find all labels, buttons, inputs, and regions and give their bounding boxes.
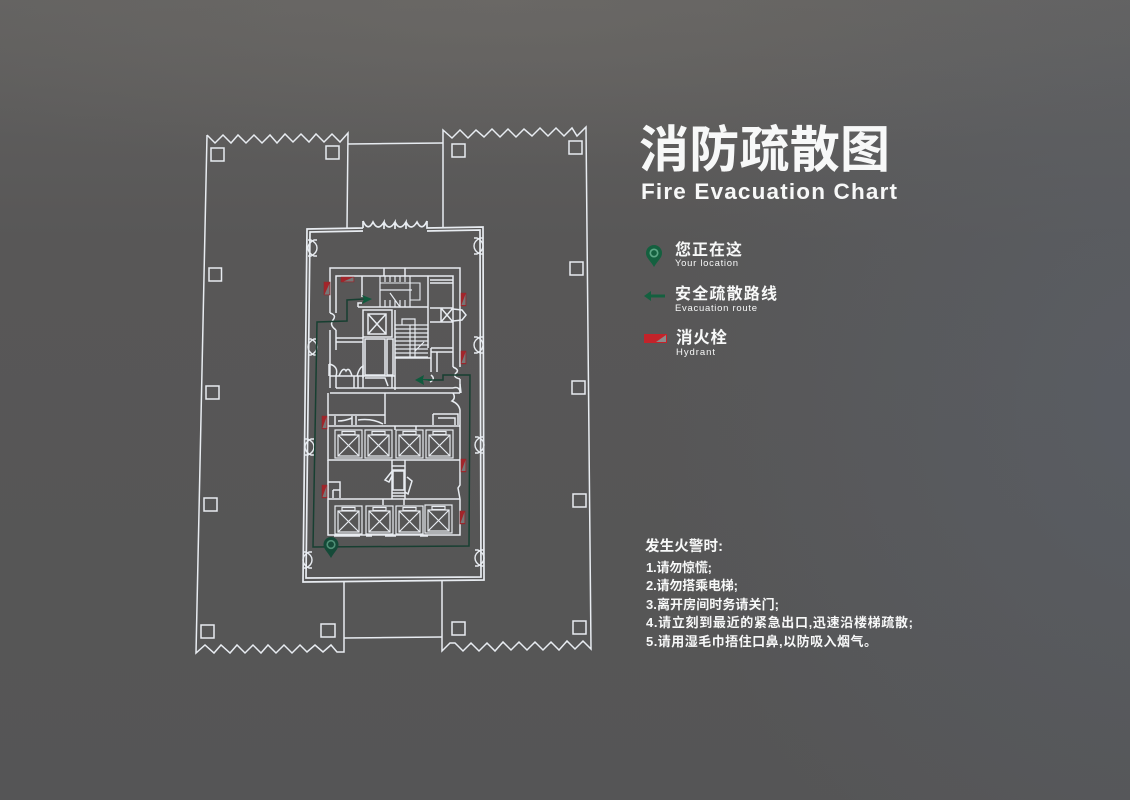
title xyxy=(639,122,898,204)
fire instructions: 3.离开房间时务请关门; xyxy=(646,597,779,612)
arrow: route up xyxy=(362,295,372,304)
legend text: your location: 您正在这 xyxy=(675,240,742,259)
fire instructions: 4.请立刻到最近的紧急出口,迅速沿楼梯疏散; xyxy=(646,615,913,630)
legend text: your location: Your location xyxy=(675,258,738,269)
upper stair xyxy=(380,276,420,307)
legend text: hydrant: Hydrant xyxy=(676,347,715,358)
title: 消防疏散图 xyxy=(639,122,890,178)
arrow: route left xyxy=(415,375,431,385)
fire instructions: 5.请用湿毛巾捂住口鼻,以防吸入烟气。 xyxy=(646,634,877,649)
hydrants on plan xyxy=(322,277,466,524)
upper core rooms xyxy=(329,268,466,393)
legend text: evacuation route: Evacuation route xyxy=(675,303,757,314)
subtitle: Fire Evacuation Chart xyxy=(641,179,898,204)
icon: location pin xyxy=(646,245,662,267)
fire instructions: 2.请勿搭乘电梯; xyxy=(646,578,738,593)
structural columns xyxy=(201,141,586,638)
legend text: evacuation route: 安全疏散路线 xyxy=(675,284,777,303)
lower stair xyxy=(395,319,428,357)
side doors xyxy=(303,238,484,568)
fire instructions: 1.请勿惊慌; xyxy=(646,560,712,575)
icon: your location pin on plan xyxy=(324,537,338,558)
floor plan xyxy=(196,127,591,653)
icon: hydrant xyxy=(644,334,667,343)
fire instructions: 发生火警时: xyxy=(645,537,723,555)
evacuation route xyxy=(313,295,470,547)
legend text: your location xyxy=(675,240,742,269)
legend text: hydrant: 消火栓 xyxy=(676,327,728,347)
icon: route arrow xyxy=(644,291,665,301)
legend xyxy=(644,240,777,358)
core walls xyxy=(303,221,484,582)
lower core rooms xyxy=(328,384,461,536)
building outline: left and right wings xyxy=(196,127,591,653)
fire instructions xyxy=(645,537,913,649)
elevators xyxy=(335,430,453,534)
legend text: evacuation route xyxy=(675,284,777,314)
legend text: hydrant xyxy=(676,327,728,358)
